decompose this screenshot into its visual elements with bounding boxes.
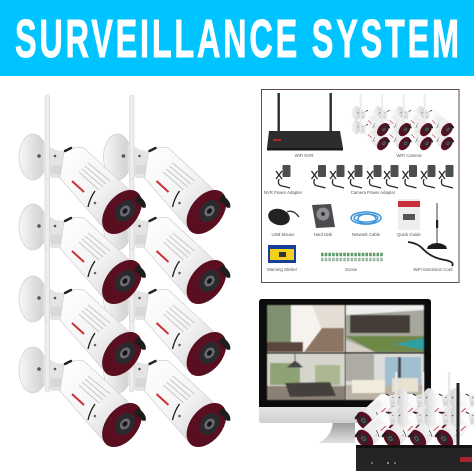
label: Hard Disk: Hard Disk — [314, 232, 333, 237]
icon: WiFi NVR recorder — [267, 93, 343, 150]
label: Camera Power Adapter: Camera Power Adapter — [351, 190, 396, 195]
label: WiFi Extension Cord: WiFi Extension Cord — [413, 267, 453, 272]
camera grid: eight white bullet cameras — [19, 95, 234, 455]
label: NVR Power Adapter: NVR Power Adapter — [264, 190, 303, 195]
icon: camera power adapters — [312, 165, 454, 188]
icon: USB mouse — [266, 206, 299, 228]
label: Screw: Screw — [345, 267, 358, 272]
feed: lounge — [346, 354, 424, 400]
feed: living room — [267, 353, 345, 400]
monitor with four-camera view — [259, 299, 431, 443]
title banner — [0, 0, 474, 76]
title: SURVEILLANCE SYSTEM — [15, 10, 459, 69]
label: WiFi NVR: WiFi NVR — [295, 153, 313, 158]
monitor bezel — [259, 299, 431, 407]
icon: warning sticker — [268, 245, 296, 263]
icon: eight WiFi cameras — [352, 94, 455, 152]
icon: screws — [321, 254, 383, 260]
icon: NVR power adapter — [276, 165, 290, 188]
label: Warning Sticker: Warning Sticker — [267, 267, 298, 272]
monitor stand — [318, 422, 355, 443]
feed: house with pool — [345, 305, 424, 352]
monitor chin — [259, 407, 431, 423]
panel: kit contents — [262, 90, 459, 282]
feed: stairway — [267, 305, 345, 352]
bundle: cameras and recorder — [353, 372, 474, 471]
cluster of eight cameras — [353, 372, 474, 451]
screen: four camera feeds — [267, 305, 424, 400]
label: WiFi Camera: WiFi Camera — [396, 153, 422, 158]
label: USB Mouse: USB Mouse — [272, 232, 295, 237]
label: Quick Guide: Quick Guide — [397, 232, 421, 237]
icon: quick guide — [398, 199, 420, 230]
icon: WiFi extension cord — [408, 203, 453, 266]
label: Network Cable: Network Cable — [352, 232, 381, 237]
icon: hard disk — [312, 204, 335, 228]
recorder with antenna — [356, 383, 472, 471]
icon: network cable — [351, 212, 381, 224]
